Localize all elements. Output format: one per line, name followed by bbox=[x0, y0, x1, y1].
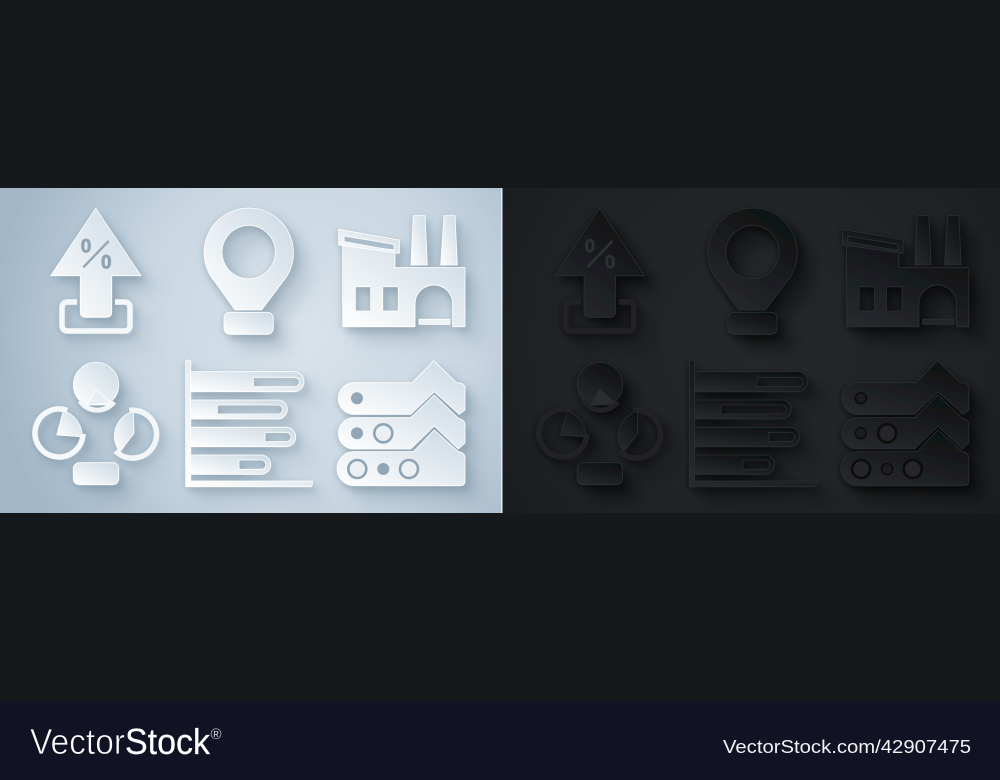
icon: percent up arrow: 0 bbox=[81, 236, 91, 258]
icon: server rack with arrows bbox=[337, 361, 465, 486]
icon: horizontal bar chart, dark bbox=[690, 360, 816, 487]
icon: percent up arrow: 0 bbox=[101, 252, 112, 274]
icon: horizontal bar chart bbox=[186, 360, 312, 487]
divider line between panels bbox=[501, 188, 502, 513]
VectorStock logo: ® bbox=[210, 726, 222, 743]
VectorStock logo: Stock bbox=[125, 721, 211, 762]
panel: dark icon set bbox=[502, 188, 1000, 513]
icon: server rack with arrows, dark bbox=[841, 361, 969, 486]
footer background bbox=[0, 701, 1000, 780]
icon: percent up arrow, dark: 0 bbox=[585, 236, 595, 258]
icon: map pin bbox=[204, 208, 293, 334]
panel: light icon set bbox=[0, 188, 501, 513]
light panel background bbox=[0, 188, 501, 513]
icon: factory bbox=[339, 216, 465, 327]
icon: pie charts, dark bbox=[539, 362, 660, 485]
footer band bbox=[0, 701, 1000, 780]
icon: pie charts bbox=[35, 362, 157, 485]
icon: percent up arrow, dark bbox=[554, 208, 645, 331]
image id URL: VectorStock.com/42907475 bbox=[723, 737, 971, 757]
icon: factory, dark bbox=[842, 216, 969, 327]
icon: map pin, dark bbox=[708, 208, 797, 334]
icon: percent up arrow bbox=[51, 208, 141, 331]
icon: percent up arrow, dark: 0 bbox=[605, 252, 615, 274]
VectorStock logo: Vector bbox=[30, 721, 125, 762]
VectorStock logo bbox=[30, 721, 222, 762]
dark panel background bbox=[502, 188, 1000, 513]
